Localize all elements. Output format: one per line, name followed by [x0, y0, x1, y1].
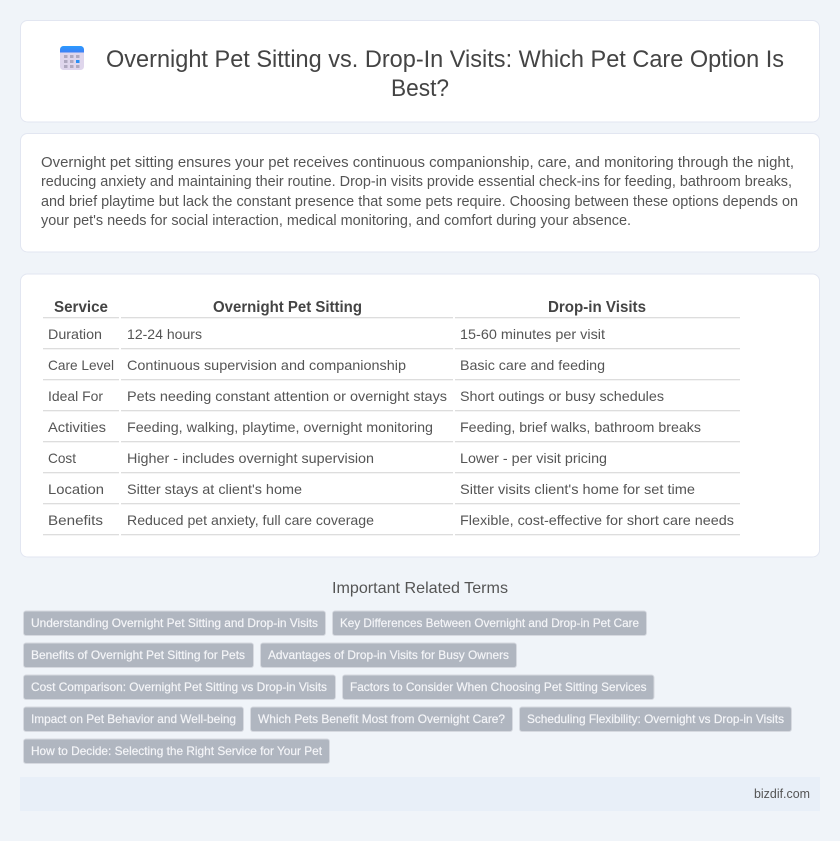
- row: location: Sitter visits client's home for set time: [460, 481, 695, 497]
- row: location: Location: [48, 481, 104, 497]
- row: duration: 12-24 hours: [127, 326, 202, 342]
- tag: Factors to Consider When Choosing Pet Sitting Services: [350, 680, 646, 694]
- text block: introduction paragraph: your pet's needs for social interaction, medical monitoring, and comfort during your absence.: [41, 213, 631, 229]
- related term tags: [24, 611, 792, 764]
- row: duration: [48, 326, 605, 342]
- row: location: [48, 481, 695, 497]
- tag: [24, 611, 326, 636]
- row: cost: [48, 450, 607, 466]
- row: ideal for: Short outings or busy schedules: [460, 388, 664, 404]
- row: duration: 15-60 minutes per visit: [460, 326, 605, 342]
- title: [106, 46, 784, 102]
- tag: Key Differences Between Overnight and Drop-in Pet Care: [340, 616, 639, 630]
- row: care level: [48, 357, 605, 373]
- row: duration: Duration: [48, 326, 102, 342]
- tag: [24, 739, 330, 764]
- row: activities: Activities: [48, 419, 106, 435]
- text block: introduction paragraph: Overnight pet sitting ensures your pet receives continuous companionship, care, and monitoring through the night,: [41, 155, 794, 171]
- row: ideal for: Ideal For: [48, 388, 103, 404]
- row: benefits: Benefits: [48, 512, 103, 528]
- tag: How to Decide: Selecting the Right Service for Your Pet: [31, 744, 323, 758]
- heading: important related terms: Important Related Terms: [332, 580, 508, 597]
- tag: Cost Comparison: Overnight Pet Sitting vs Drop-in Visits: [31, 680, 327, 694]
- panel: title card: [20, 20, 820, 122]
- row: cost: Cost: [48, 450, 76, 466]
- panel: comparison table: [20, 274, 820, 557]
- row: benefits: Flexible, cost-effective for short care needs: [460, 512, 734, 528]
- row: benefits: [48, 512, 734, 528]
- tag: [260, 643, 516, 668]
- row: location: Sitter stays at client's home: [127, 481, 302, 497]
- footer bar: [20, 777, 820, 811]
- row: activities: Feeding, brief walks, bathroom breaks: [460, 419, 701, 435]
- title: Overnight Pet Sitting vs. Drop-In Visits: Which Pet Care Option Is: [106, 46, 784, 73]
- row: cost: Higher - includes overnight supervision: [127, 450, 374, 466]
- text block: introduction paragraph: reducing anxiety and maintaining their routine. Drop-in visits provide essential check-ins for feeding, bathroom breaks,: [41, 174, 792, 190]
- tag: Scheduling Flexibility: Overnight vs Drop-in Visits: [527, 712, 784, 726]
- tag: Advantages of Drop-in Visits for Busy Owners: [268, 648, 509, 662]
- table header: Drop-in Visits: [548, 299, 646, 316]
- row: activities: Feeding, walking, playtime, overnight monitoring: [127, 419, 433, 435]
- tag: Benefits of Overnight Pet Sitting for Pets: [31, 648, 245, 662]
- row: care level: Continuous supervision and companionship: [127, 357, 406, 373]
- tag: [250, 707, 512, 732]
- panel: introduction: [20, 134, 820, 252]
- row: ideal for: [48, 388, 664, 404]
- tag: [24, 707, 244, 732]
- table header: Overnight Pet Sitting: [213, 299, 362, 316]
- tag: [24, 675, 336, 700]
- row: ideal for: Pets needing constant attention or overnight stays: [127, 388, 447, 404]
- tag: [342, 675, 654, 700]
- text block: introduction paragraph: [41, 155, 798, 229]
- tag: [24, 643, 254, 668]
- title: Best?: [391, 75, 449, 102]
- text block: introduction paragraph: and brief playtime but lack the constant presence that some pets require. Choosing between these options depends on: [41, 194, 798, 210]
- table header: Service: [54, 299, 108, 316]
- tag: [520, 707, 792, 732]
- row: care level: Care Level: [48, 357, 114, 373]
- row: activities: [48, 419, 701, 435]
- row: care level: Basic care and feeding: [460, 357, 605, 373]
- row: benefits: Reduced pet anxiety, full care coverage: [127, 512, 374, 528]
- row: cost: Lower - per visit pricing: [460, 450, 607, 466]
- tag: Understanding Overnight Pet Sitting and Drop-in Visits: [31, 616, 318, 630]
- tag: Which Pets Benefit Most from Overnight Care?: [258, 712, 505, 726]
- footer source: bizdif.com: [754, 787, 810, 801]
- tag: [332, 611, 646, 636]
- table header: [54, 299, 646, 316]
- icon: calendar: [60, 46, 84, 70]
- tag: Impact on Pet Behavior and Well-being: [31, 712, 236, 726]
